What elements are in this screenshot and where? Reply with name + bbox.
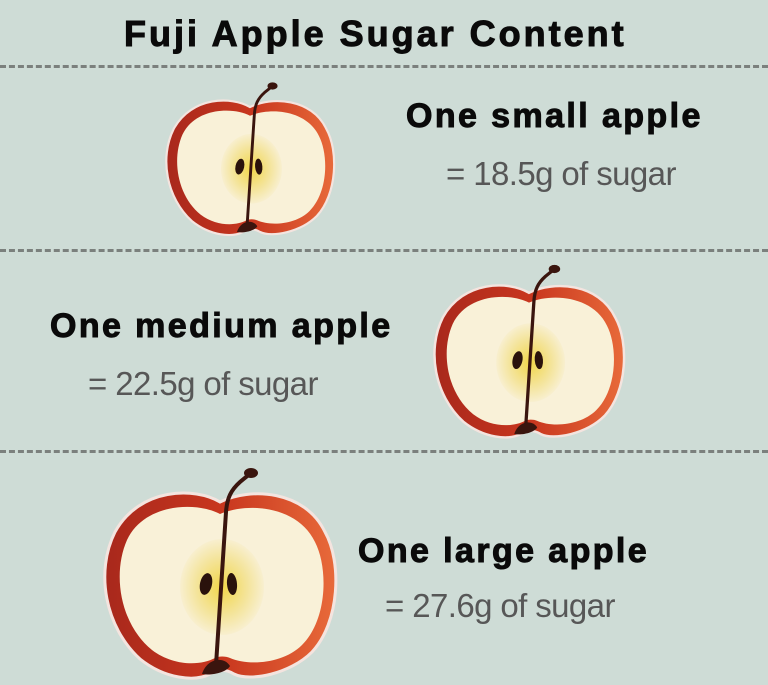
text: large sugar: = 27.6g of sugar [385,587,615,624]
text: medium sugar: = 22.5g of sugar [88,365,318,402]
heading: medium: One medium apple [50,307,393,345]
icon: large apple [103,468,338,680]
heading: large: One large apple [358,532,649,570]
title: Fuji Apple Sugar Content [124,13,627,54]
icon: small apple [165,82,336,236]
icon: medium apple [433,264,626,439]
text: small sugar: = 18.5g of sugar [446,155,676,192]
heading: small: One small apple [406,97,703,135]
